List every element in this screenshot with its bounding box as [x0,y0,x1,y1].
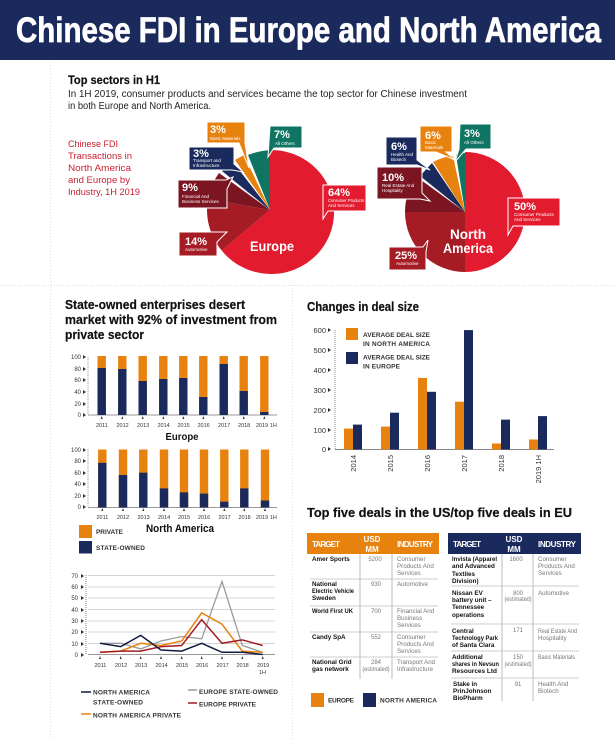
heading: state-owned enterprises: market with 92% of investment from [65,312,277,327]
table: Europe deals: 284 [371,660,382,666]
callout: NA consumer products [508,198,560,235]
table: Europe deals: Financial And [397,608,435,615]
callout: Europe basic materials: 3% [210,124,226,136]
table: North America deals: (estimated) [504,662,532,668]
table: Europe deals: gas network [312,666,349,673]
stacked bar chart: North America: 80 [74,459,82,465]
table: Europe deals: 5200 [368,557,382,563]
label: Europe: Europe [166,431,199,443]
line chart: deals by ownership: 2016 [196,663,208,669]
callout: Europe automotive: Automotive [185,247,208,252]
bar chart: average deal size: 2015 [386,455,395,472]
table: Europe deals: (estimated) [362,667,390,673]
line chart: deals by ownership: 2014 [156,663,168,669]
callout: NA real estate [377,167,430,201]
callout: Europe all others: 7% [274,129,290,141]
callout: NA basic materials [420,126,455,160]
stacked bar chart: North America: 0 [78,505,82,511]
bar chart: average deal size: 500 [313,346,326,355]
line chart: deals by ownership: 1H [259,670,266,676]
panel: top five deals [307,506,581,707]
callout: Europe transport: Transport and [193,158,221,163]
callout: NA all others: All Others [464,140,485,145]
table: North America deals: PrinJohnson [453,688,492,695]
legend: tables: EUROPE [328,698,355,704]
label: North America: North America [146,523,215,535]
table: North America deals: Automotive [538,590,570,597]
table: Europe deals: Sweden [312,595,336,602]
intro text: in both Europe and North America. [68,101,211,112]
table: Europe deals: Transport And [397,659,436,666]
legend: line chart: EUROPE PRIVATE [199,702,257,708]
callout: Europe transport: Infrastructure [193,163,220,168]
table: North America deals: Invista (Apparel [452,556,497,563]
stacked bar chart: Europe: 0 [78,413,82,419]
stacked bar chart: Europe: 2016 [198,423,210,429]
callout: Europe basic materials [207,122,249,168]
heading: changes in deal size: Changes in deal size [307,300,419,314]
bar chart: average deal size: 2016 [423,455,432,472]
table: Europe deals: USD [364,535,381,544]
callout: Europe consumer products [323,185,366,219]
table: Europe deals: 700 [371,609,382,615]
stacked bar chart: North America: 60 [74,471,82,477]
callout: NA automotive [389,240,428,270]
stacked bar chart: Europe: 60 [74,378,82,384]
table: North America deals: USD [506,535,523,544]
callout: Europe all others: All Others [275,141,296,146]
callout: NA health: Health And [391,152,414,157]
table: Europe deals: World First UK [312,608,353,615]
side caption: Chinese FDI [68,139,118,149]
legend: deal size: AVERAGE DEAL SIZE [363,332,431,339]
panel: changes in deal size [307,300,554,483]
side caption: Industry, 1H 2019 [68,187,140,197]
legend: private and state-owned: STATE-OWNED [96,545,145,552]
table: North America deals: Division) [452,578,479,585]
table: North America deals: 1600 [509,557,523,563]
side caption: and Europe by [68,175,131,185]
table: North America deals: of Santa Clara [452,642,495,649]
table: Europe deals: National Grid [312,659,352,666]
line chart: deals by ownership: 2011 [94,663,106,669]
legend: deal size: AVERAGE DEAL SIZE [363,354,431,362]
callout: NA basic materials: Basic [425,140,437,145]
table: Europe deals: 930 [371,582,382,588]
stacked bar chart: North America: 2013 [138,515,150,521]
callout: Europe financial: Financial And [182,194,210,199]
table: Europe deals: Candy SpA [312,634,346,641]
bar chart: average deal size: 400 [313,366,326,375]
side caption [68,139,140,197]
table: North America deals: Services [538,570,562,577]
stacked bar chart: Europe: 100 [71,355,82,361]
stacked bar chart: Europe: 20 [74,402,82,408]
line chart: deals by ownership: 2015 [176,663,188,669]
panel: state-owned vs private [65,297,278,720]
table: North America deals: Technology Park [452,635,498,642]
stacked bar chart: North America: 2011 [96,515,108,521]
stacked bar chart: North America: 2016 [198,515,210,521]
table: North America deals: INDUSTRY [538,540,577,549]
callout: NA real estate: Real Estate And [382,183,415,188]
table: North America deals: 800 [513,591,524,597]
table: North America deals: Biotech [538,688,559,695]
line chart: deals by ownership: 2013 [135,663,147,669]
intro text [68,89,467,112]
stacked bar chart: Europe: 40 [74,390,82,396]
callout: Europe automotive [179,232,227,256]
stacked bar chart: North America: 20 [74,494,82,500]
table: Europe deals: Amer Sports [312,556,350,563]
callout: NA health: Biotech [391,157,407,162]
callout: NA automotive: 25% [395,250,417,262]
bar chart: average deal size: 2014 [349,455,358,472]
line chart: deals by ownership [71,574,275,676]
callout: NA all others [455,124,491,162]
side caption: Transactions in [68,151,132,161]
legend: private and state-owned [79,525,145,554]
callout: Europe financial [178,177,233,208]
stacked bar chart: North America [71,448,277,521]
table: North America deals: battery unit – [452,597,492,604]
table: North America deals: Health And [538,681,569,688]
callout: Europe consumer products: And Services [328,203,355,208]
pie chart: North America: North [450,226,486,242]
stacked bar chart: North America: 40 [74,482,82,488]
pie chart: Europe [207,150,334,274]
table: North America deals: Additional [452,654,483,661]
table: North America deals: operations [452,612,485,619]
table: Europe deals: Electric Vehicle [312,588,354,595]
legend: private and state-owned: PRIVATE [96,529,124,536]
bar chart: average deal size: 300 [313,386,326,395]
table: North America deals: Stake in [453,681,477,688]
line chart: deals by ownership: 2017 [216,663,229,669]
table: North America deals: BioPharm [453,695,483,702]
stacked bar chart: Europe: 2014 [158,423,170,429]
stacked bar chart: North America: 2014 [158,515,170,521]
stacked bar chart: Europe: 80 [74,367,82,373]
callout: NA all others: 3% [464,128,480,140]
table: Europe deals: Services [397,622,421,629]
line chart: deals by ownership: 40 [71,608,79,614]
callout: Europe automotive: 14% [185,236,207,248]
callout: NA basic materials: Materials [425,145,444,150]
table: Europe deals: INDUSTRY [397,540,434,549]
callout: Europe consumer products: Consumer Products [328,198,365,203]
callout: NA consumer products: And Services [514,217,541,222]
bar chart: average deal size: 2018 [497,455,506,472]
callout: NA health [386,137,430,170]
table: North America deals: and Advanced [452,563,495,570]
stacked bar chart: Europe: 2011 [96,423,108,429]
line chart: deals by ownership: 10 [71,642,79,648]
bar chart: average deal size: 100 [313,426,326,435]
table: Europe deals: Services [397,648,421,655]
bar chart: average deal size [313,326,554,483]
table: North America deals: MM [507,545,521,554]
legend: line chart: STATE-OWNED [93,700,143,706]
table: Europe deals: National [312,581,337,588]
table: North America deals: shares in Nevsun [452,661,499,668]
line chart: deals by ownership: 20 [71,630,79,636]
stacked bar chart: Europe: 2019 1H [256,423,277,429]
legend: line chart: NORTH AMERICA PRIVATE [93,712,182,720]
side caption: North America [68,163,131,173]
callout: Europe financial: 9% [182,182,198,194]
heading: state-owned enterprises: State-owned enterprises desert [65,297,246,312]
callout: Europe financial: Business Services [182,199,220,204]
table: Europe deals: Automotive [397,581,429,588]
stacked bar chart: Europe: 2012 [116,423,129,429]
callout: Europe consumer products: 64% [328,187,350,199]
heading: state-owned enterprises: private sector [65,327,144,342]
callout: Europe transport [189,147,243,172]
stacked bar chart: Europe: 2015 [178,423,190,429]
callout: Europe transport: 3% [193,148,209,160]
table: North America deals: Products And [538,563,575,570]
line chart: deals by ownership: 2019 [257,663,269,669]
line chart: deals by ownership: 2018 [236,663,249,669]
legend: deal size: IN NORTH AMERICA [363,341,430,348]
stacked bar chart: North America: 2019 1H [256,515,277,521]
line chart: deals by ownership: 0 [75,653,79,659]
table: North America deals: Hospitality [538,635,567,642]
bar chart: average deal size: 0 [322,445,326,454]
legend: tables: NORTH AMERICA [380,698,437,704]
legend: deal size [346,328,431,370]
table: North America deals: 150 [513,655,524,661]
table: Europe deals [307,533,439,679]
table: Europe deals: MM [365,545,379,554]
table: Europe deals: Services [397,570,421,577]
table: North America deals: Resources Ltd [452,668,497,675]
line chart: deals by ownership: 2012 [115,663,127,669]
bar chart: average deal size: 600 [313,326,326,335]
table: North America deals: Consumer [538,556,567,563]
pie chart: North America: America [443,240,493,256]
callout: Europe basic materials: Basic Materials [210,136,241,141]
bar chart: average deal size: 2017 [460,455,469,472]
line chart: deals by ownership: 30 [71,619,79,625]
stacked bar chart: North America: 2017 [218,515,231,521]
legend: line chart [81,689,278,720]
callout: NA automotive: Automotive [396,261,419,266]
table: North America deals: (estimated) [504,597,532,603]
table: North America deals: Real Estate And [538,628,577,635]
table: Europe deals: Business [397,615,422,622]
heading: state-owned enterprises [65,297,277,342]
bar chart: average deal size: 2019 1H [534,455,543,483]
legend: deal size: IN EUROPE [363,364,401,370]
heading: top sectors: Top sectors in H1 [68,73,160,87]
table: North America deals: Tennessee [452,604,485,611]
table: Europe deals: Consumer [397,556,426,563]
callout: NA health: 6% [391,141,407,153]
callout: Europe all others [268,126,302,157]
stacked bar chart: North America: 100 [71,448,82,454]
callout: NA consumer products: 50% [514,201,536,213]
stacked bar chart: North America: 2018 [238,515,251,521]
line chart: deals by ownership: 70 [71,574,79,580]
table: Europe deals: Consumer [397,634,426,641]
stacked bar chart: Europe: 2013 [137,423,149,429]
callout: NA basic materials: 6% [425,130,441,142]
stacked bar chart: Europe: 2017 [218,423,230,429]
table: North America deals: Basic Materials [538,654,575,661]
stacked bar chart: North America: 2012 [117,515,129,521]
table: North America deals: 91 [515,682,522,688]
table: Europe deals: TARGET [312,540,340,549]
table: Europe deals: 552 [371,635,382,641]
line chart: deals by ownership: 60 [71,585,79,591]
intro text: In 1H 2019, consumer products and services became the top sector for Chinese investment [68,89,467,100]
table: North America deals: Textiles [452,571,475,578]
legend: line chart: EUROPE STATE-OWNED [199,689,278,696]
stacked bar chart: Europe [71,355,277,429]
panel: top sectors [68,73,560,274]
table: North America deals: TARGET [453,540,481,549]
pie chart: Europe: Europe [250,238,294,254]
pie chart: North America [405,152,525,272]
table: North America deals: Nissan EV [452,590,484,597]
table: Europe deals: Products And [397,641,434,648]
bar chart: average deal size: 200 [313,406,326,415]
header banner [0,0,615,60]
table: Europe deals: Infrastructure [397,666,434,673]
table: North America deals [448,533,581,702]
legend: tables [311,693,437,707]
stacked bar chart: Europe: 2018 [238,423,250,429]
table: North America deals: 171 [513,628,524,634]
stacked bar chart: North America: 2015 [178,515,190,521]
heading: top five deals: Top five deals in the US/top five deals in EU [307,506,572,520]
legend: line chart: NORTH AMERICA [93,690,150,696]
table: North America deals: Central [452,628,474,635]
line chart: deals by ownership: 50 [71,596,79,602]
callout: NA consumer products: Consumer Products [514,212,555,217]
callout: NA real estate: 10% [382,172,404,184]
table: Europe deals: Products And [397,563,434,570]
callout: NA real estate: Hospitality [382,188,404,193]
